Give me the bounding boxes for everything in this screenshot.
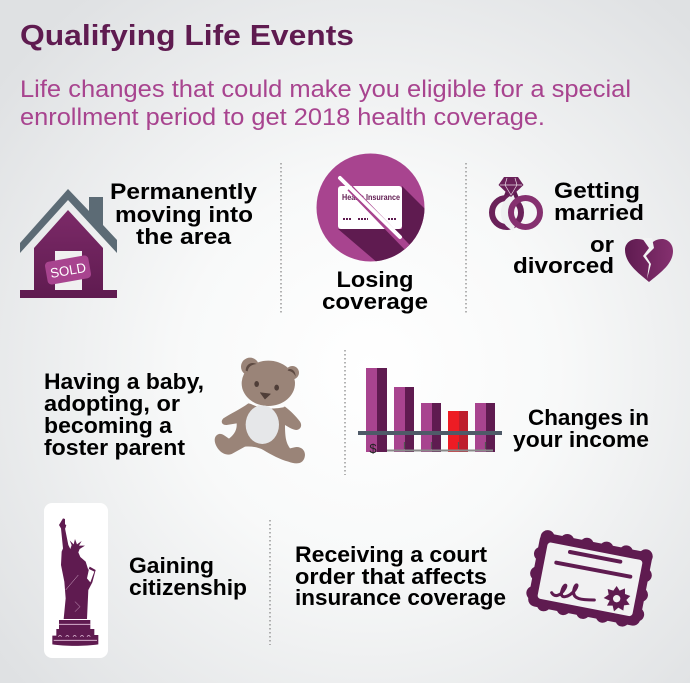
- icon: broken heart: [625, 238, 673, 282]
- label: citizenship: [129, 553, 247, 600]
- label: getting married: [554, 178, 644, 225]
- label: court order: Receiving a court: [295, 542, 488, 567]
- label: citizenship: citizenship: [129, 575, 247, 600]
- label: changes in income: your income: [513, 427, 649, 452]
- bar chart: falling income: $: [369, 441, 377, 456]
- panel: married or divorced: [492, 177, 673, 282]
- label: moving: [110, 179, 258, 249]
- label: or divorced: divorced: [513, 253, 614, 278]
- label: changes in income: Changes in: [528, 405, 649, 430]
- label: moving: moving into: [115, 202, 253, 227]
- label: citizenship: Gaining: [129, 553, 214, 578]
- icon: wedding rings: [492, 177, 540, 227]
- panel: citizenship: [44, 503, 247, 658]
- label: losing coverage: [322, 267, 428, 314]
- panel: moving: [20, 179, 258, 298]
- label: having a baby: becoming a: [44, 413, 172, 438]
- label: getting married: Getting: [554, 178, 640, 203]
- bar chart: falling income: [358, 368, 502, 456]
- label: or divorced: or: [590, 232, 614, 257]
- label: having a baby: [44, 369, 204, 460]
- label: having a baby: adopting, or: [44, 391, 180, 416]
- icon: sold house: [20, 189, 117, 298]
- panel: changes in income: [358, 368, 649, 456]
- title: Qualifying Life Events: [20, 20, 354, 52]
- subtitle: enrollment period to get 2018 health coverage.: [20, 104, 545, 131]
- panel: having a baby: [44, 358, 305, 463]
- label: having a baby: foster parent: [44, 435, 186, 460]
- label: court order: insurance coverage: [295, 585, 506, 610]
- subtitle: Life changes that could make you eligible for a special: [20, 76, 631, 103]
- icon: crossed out insurance card: [316, 154, 424, 262]
- panel: court order: [295, 536, 648, 622]
- icon: teddy bear: [215, 358, 305, 463]
- label: changes in income: [513, 405, 649, 452]
- subtitle: [20, 76, 631, 131]
- icon: sold house: SOLD: [49, 260, 87, 281]
- label: losing coverage: coverage: [322, 289, 428, 314]
- icon: court order certificate: [532, 536, 648, 622]
- label: getting married: married: [554, 200, 644, 225]
- icon: statue of liberty card: [44, 503, 108, 658]
- label: or divorced: [513, 232, 614, 278]
- icon: crossed out insurance card: Health Insurance: [342, 193, 400, 202]
- label: having a baby: Having a baby,: [44, 369, 204, 394]
- label: court order: [295, 542, 506, 610]
- panel: losing coverage: [316, 154, 432, 314]
- label: court order: order that affects: [295, 564, 487, 589]
- label: losing coverage: Losing: [336, 267, 414, 292]
- label: moving: the area: [136, 224, 232, 249]
- label: moving: Permanently: [110, 179, 258, 204]
